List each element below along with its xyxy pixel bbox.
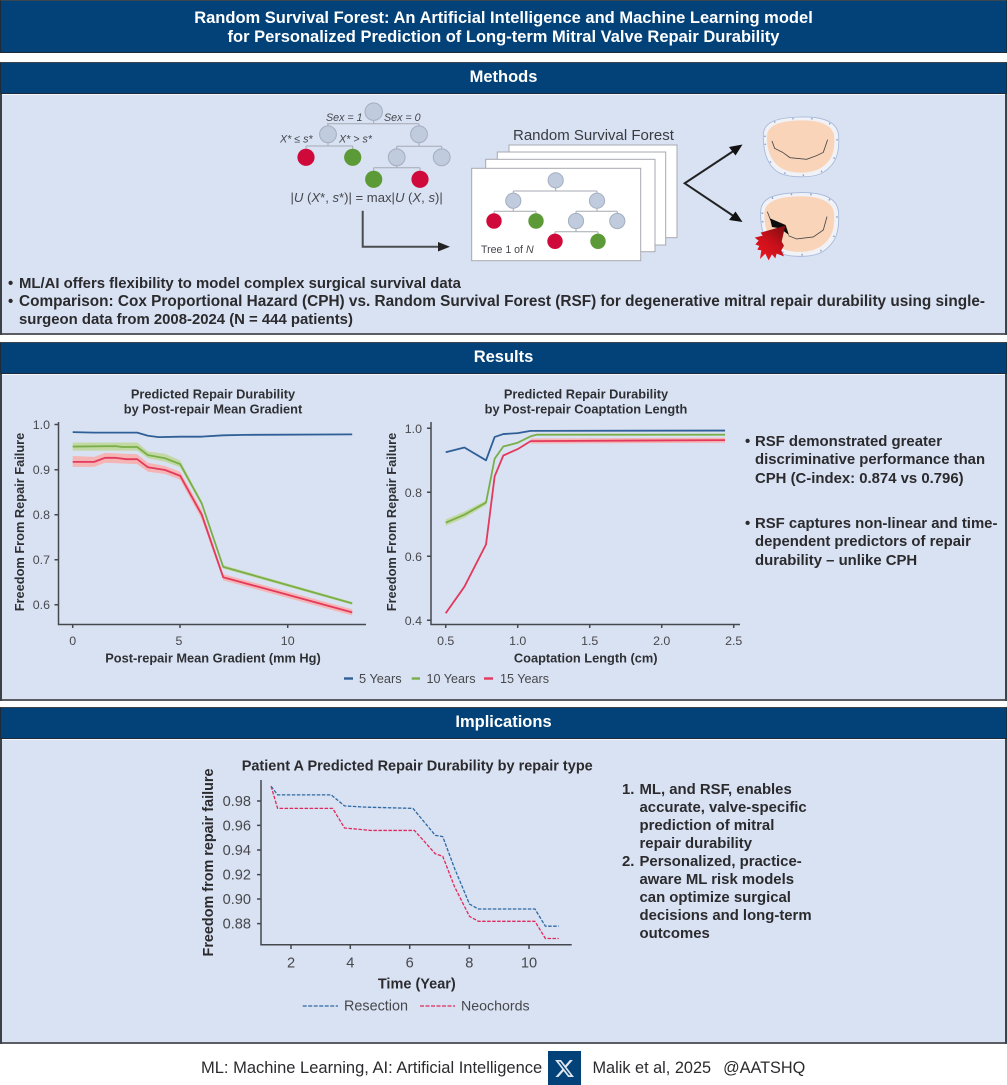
implications numbered list: repair durability bbox=[640, 836, 752, 852]
diagram: single survival decision tree: Sex = 0 bbox=[384, 112, 421, 124]
title banner: Random Survival Forest: An Artificial Intelligence and Machine Learning model bbox=[194, 8, 813, 26]
icon: competent mitral valve bbox=[762, 116, 840, 178]
results bullet text: • bbox=[745, 516, 750, 532]
diagram: single survival decision tree: X* > s* bbox=[338, 134, 373, 146]
title banner: for Personalized Prediction of Long-term Mitral Valve Repair Durability bbox=[228, 28, 779, 46]
implications numbered list: 2. bbox=[622, 854, 634, 870]
chart legend: 15 Years bbox=[500, 672, 549, 686]
line chart: durability by coaptation length: 1.0 bbox=[405, 422, 422, 436]
results bullet text: dependent predictors of repair bbox=[755, 534, 971, 550]
arrow: tree to forest bbox=[362, 210, 450, 252]
line chart: durability by coaptation length: 0.8 bbox=[405, 486, 422, 500]
line chart: patient A durability by repair type: 0.96 bbox=[223, 818, 251, 834]
line chart: durability by coaptation length: Predicted Repair Durability bbox=[504, 386, 669, 401]
chart legend bbox=[344, 671, 549, 686]
methods heading: Methods bbox=[470, 68, 537, 86]
line chart: durability by coaptation length: 1.5 bbox=[581, 634, 598, 648]
line chart: patient A durability by repair type: 6 bbox=[406, 955, 414, 971]
implications numbered list: outcomes bbox=[640, 926, 710, 942]
results bullet text: discriminative performance than bbox=[755, 452, 985, 468]
implications numbered list: accurate, valve-specific bbox=[640, 800, 807, 816]
results bullet text bbox=[745, 434, 997, 569]
line chart: durability by mean gradient: 0.8 bbox=[33, 508, 50, 522]
diagram: random survival forest stack bbox=[471, 127, 678, 262]
chart legend: 10 Years bbox=[426, 672, 476, 686]
line chart: durability by coaptation length: 0.4 bbox=[405, 614, 422, 628]
line chart: durability by mean gradient: 1.0 bbox=[33, 418, 50, 432]
line chart: durability by coaptation length: 2.0 bbox=[653, 634, 670, 648]
implications numbered list: 1. bbox=[622, 782, 634, 798]
line chart: patient A durability by repair type: 0.98 bbox=[223, 794, 251, 810]
implications numbered list: prediction of mitral bbox=[640, 818, 774, 834]
line chart: patient A durability by repair type: Resection bbox=[344, 999, 408, 1015]
arrows: forest to valve outcomes bbox=[683, 144, 742, 222]
methods bullet list: • bbox=[8, 294, 13, 310]
diagram: single survival decision tree: X* ≤ s* bbox=[279, 134, 313, 146]
line chart: patient A durability by repair type: 4 bbox=[346, 955, 354, 971]
line chart: durability by mean gradient bbox=[12, 386, 366, 666]
panel: implications bbox=[0, 739, 1007, 1044]
results bullet text: • bbox=[745, 434, 750, 450]
implications numbered list: decisions and long-term bbox=[640, 908, 812, 924]
line chart: patient A durability by repair type: 0.88 bbox=[223, 917, 251, 933]
line chart: patient A durability by repair type: 0.90 bbox=[223, 892, 251, 908]
methods bullet list: ML/AI offers flexibility to model complex surgical survival data bbox=[19, 276, 461, 292]
diagram: random survival forest stack: Tree 1 of N bbox=[481, 244, 534, 256]
implications numbered list bbox=[622, 782, 812, 942]
line chart: durability by mean gradient: 0.9 bbox=[33, 463, 50, 477]
results bullet text: RSF captures non-linear and time- bbox=[755, 516, 997, 532]
diagram: random survival forest stack: Random Survival Forest bbox=[513, 127, 675, 144]
diagram: single survival decision tree: Sex = 1 bbox=[326, 112, 363, 124]
line chart: durability by mean gradient: 10 bbox=[281, 634, 295, 648]
panel: results bbox=[0, 374, 1007, 701]
line chart: durability by mean gradient: 5 bbox=[176, 634, 183, 648]
icon: X logo bbox=[548, 1051, 581, 1085]
results bullet text: RSF demonstrated greater bbox=[755, 434, 942, 450]
line chart: patient A durability by repair type: 10 bbox=[521, 955, 537, 971]
icon: failed mitral valve with regurgitant jet bbox=[754, 192, 840, 260]
methods bullet list: Comparison: Cox Proportional Hazard (CPH) vs. Random Survival Forest (RSF) for degenerative mitral repair durability using single- bbox=[19, 293, 985, 310]
line chart: durability by coaptation length: by Post-repair Coaptation Length bbox=[485, 401, 687, 416]
diagram: single survival decision tree: |U (X*, s*)| = max|U (X, s)| bbox=[290, 190, 443, 205]
line chart: durability by coaptation length: 2.5 bbox=[725, 634, 742, 648]
line chart: patient A durability by repair type: Patient A Predicted Repair Durability by repair type bbox=[242, 759, 593, 775]
implications numbered list: aware ML risk models bbox=[640, 872, 794, 888]
line chart: durability by coaptation length: Freedom From Repair Failure bbox=[384, 433, 399, 611]
methods bullet list bbox=[8, 276, 985, 328]
line chart: durability by mean gradient: 0.6 bbox=[33, 598, 50, 612]
line chart: durability by coaptation length: 0.5 bbox=[437, 634, 454, 648]
implications numbered list: Personalized, practice- bbox=[640, 854, 802, 870]
chart legend: 5 Years bbox=[359, 671, 402, 686]
results heading: Results bbox=[474, 348, 533, 366]
results bullet text: CPH (C-index: 0.874 vs 0.796) bbox=[755, 471, 964, 487]
methods heading bbox=[0, 62, 1007, 94]
line chart: patient A durability by repair type: Time (Year) bbox=[378, 976, 456, 992]
line chart: patient A durability by repair type: 0.92 bbox=[223, 868, 251, 884]
line chart: patient A durability by repair type: 8 bbox=[465, 955, 473, 971]
line chart: durability by coaptation length: 1.0 bbox=[509, 634, 526, 648]
line chart: patient A durability by repair type: Freedom from repair failure bbox=[201, 769, 217, 956]
line chart: patient A durability by repair type: 2 bbox=[287, 955, 295, 971]
panel: methods bbox=[0, 94, 1007, 335]
implications numbered list: ML, and RSF, enables bbox=[640, 782, 792, 798]
methods bullet list: surgeon data from 2008-2024 (N = 444 patients) bbox=[19, 312, 353, 328]
footer citation: Malik et al, 2025 @AATSHQ bbox=[592, 1059, 805, 1077]
line chart: patient A durability by repair type: Neochords bbox=[461, 999, 530, 1015]
results heading bbox=[0, 342, 1007, 374]
line chart: durability by mean gradient: Freedom From Repair Failure bbox=[12, 433, 27, 611]
line chart: durability by coaptation length: Coaptation Length (cm) bbox=[514, 651, 658, 666]
methods bullet list: • bbox=[8, 276, 13, 292]
line chart: durability by mean gradient: Post-repair Mean Gradient (mm Hg) bbox=[105, 651, 321, 666]
footer abbreviations: ML: Machine Learning, AI: Artificial Intelligence bbox=[201, 1059, 542, 1077]
line chart: patient A durability by repair type bbox=[201, 759, 593, 1015]
implications heading: Implications bbox=[455, 713, 552, 731]
line chart: durability by mean gradient: Predicted Repair Durability bbox=[131, 386, 296, 401]
line chart: durability by mean gradient: 0.7 bbox=[33, 553, 50, 567]
implications numbered list: can optimize surgical bbox=[640, 890, 791, 906]
title banner bbox=[0, 0, 1007, 53]
line chart: patient A durability by repair type: 0.94 bbox=[223, 843, 251, 859]
results bullet text: durability – unlike CPH bbox=[755, 553, 917, 569]
diagram: single survival decision tree bbox=[279, 102, 451, 205]
line chart: durability by mean gradient: 0 bbox=[69, 634, 76, 648]
line chart: durability by mean gradient: by Post-repair Mean Gradient bbox=[124, 401, 303, 416]
line chart: durability by coaptation length: 0.6 bbox=[405, 550, 422, 564]
implications heading bbox=[0, 707, 1007, 739]
line chart: durability by coaptation length bbox=[384, 386, 742, 666]
